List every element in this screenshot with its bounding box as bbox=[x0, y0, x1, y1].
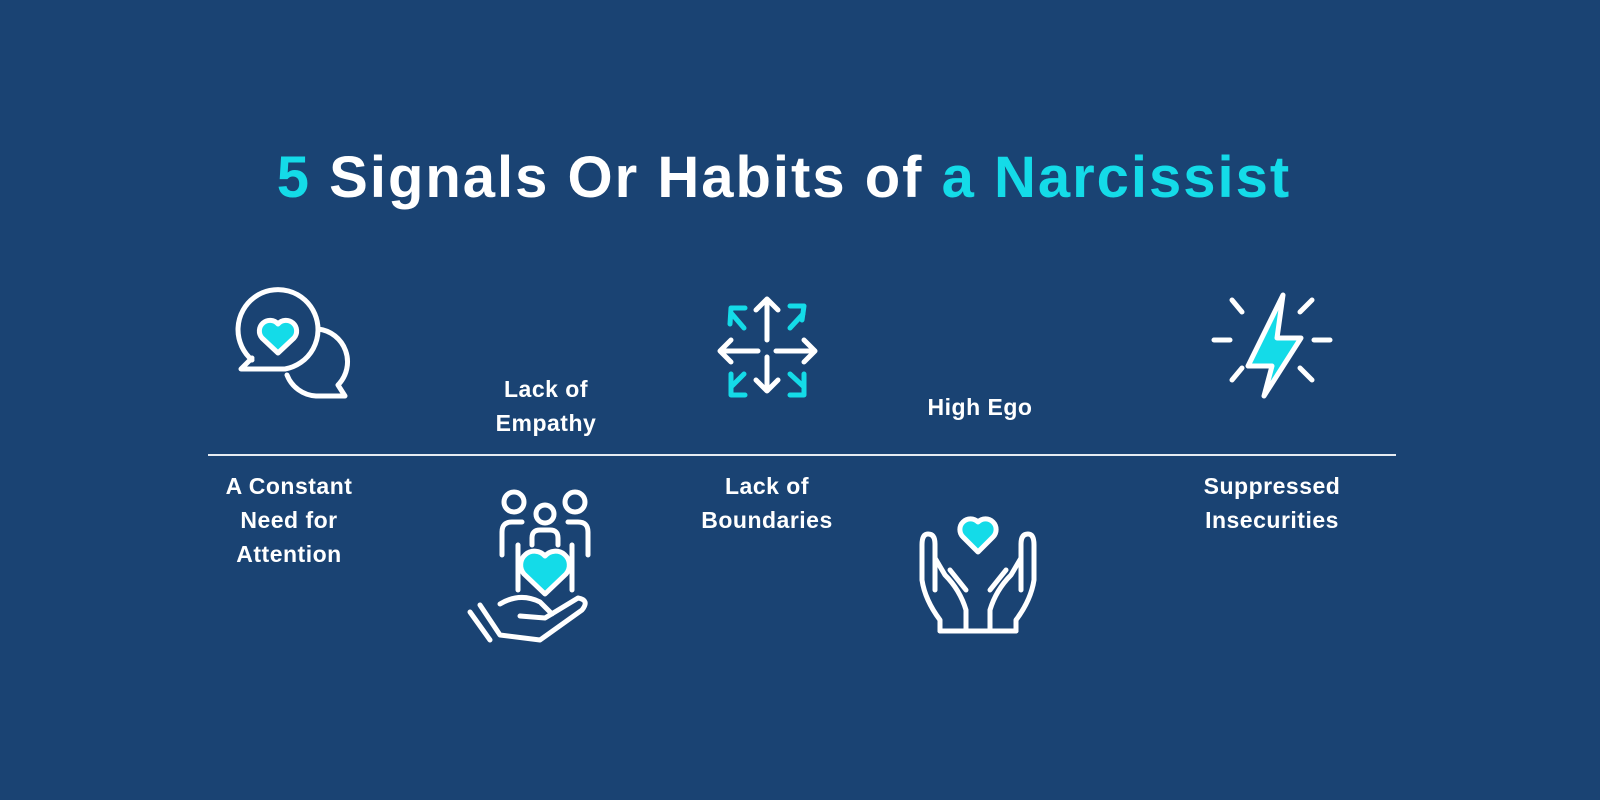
icon: people with heart in hand bbox=[470, 492, 588, 640]
label: A Constant Need for Attention: Need for bbox=[240, 507, 338, 533]
label: Suppressed Insecurities: Insecurities bbox=[1205, 507, 1339, 533]
label: Lack of Empathy: Empathy bbox=[496, 410, 596, 436]
label: Lack of Boundaries: Boundaries bbox=[701, 507, 833, 533]
label: A Constant Need for Attention: Attention bbox=[236, 541, 342, 567]
icon: speech bubbles with heart bbox=[238, 290, 348, 396]
label: Suppressed Insecurities: Suppressed bbox=[1204, 473, 1340, 499]
icon: hands holding heart bbox=[922, 519, 1034, 631]
title: 5 Signals Or Habits of a Narcissist bbox=[277, 145, 1291, 210]
label: Lack of Empathy: Lack of bbox=[504, 376, 588, 402]
icon: lightning bolt bbox=[1214, 295, 1330, 396]
label: High Ego: High Ego bbox=[928, 394, 1032, 420]
label: A Constant Need for Attention: A Constant bbox=[226, 473, 352, 499]
label: Lack of Boundaries: Lack of bbox=[725, 473, 809, 499]
icon: arrows in all directions bbox=[720, 299, 815, 395]
